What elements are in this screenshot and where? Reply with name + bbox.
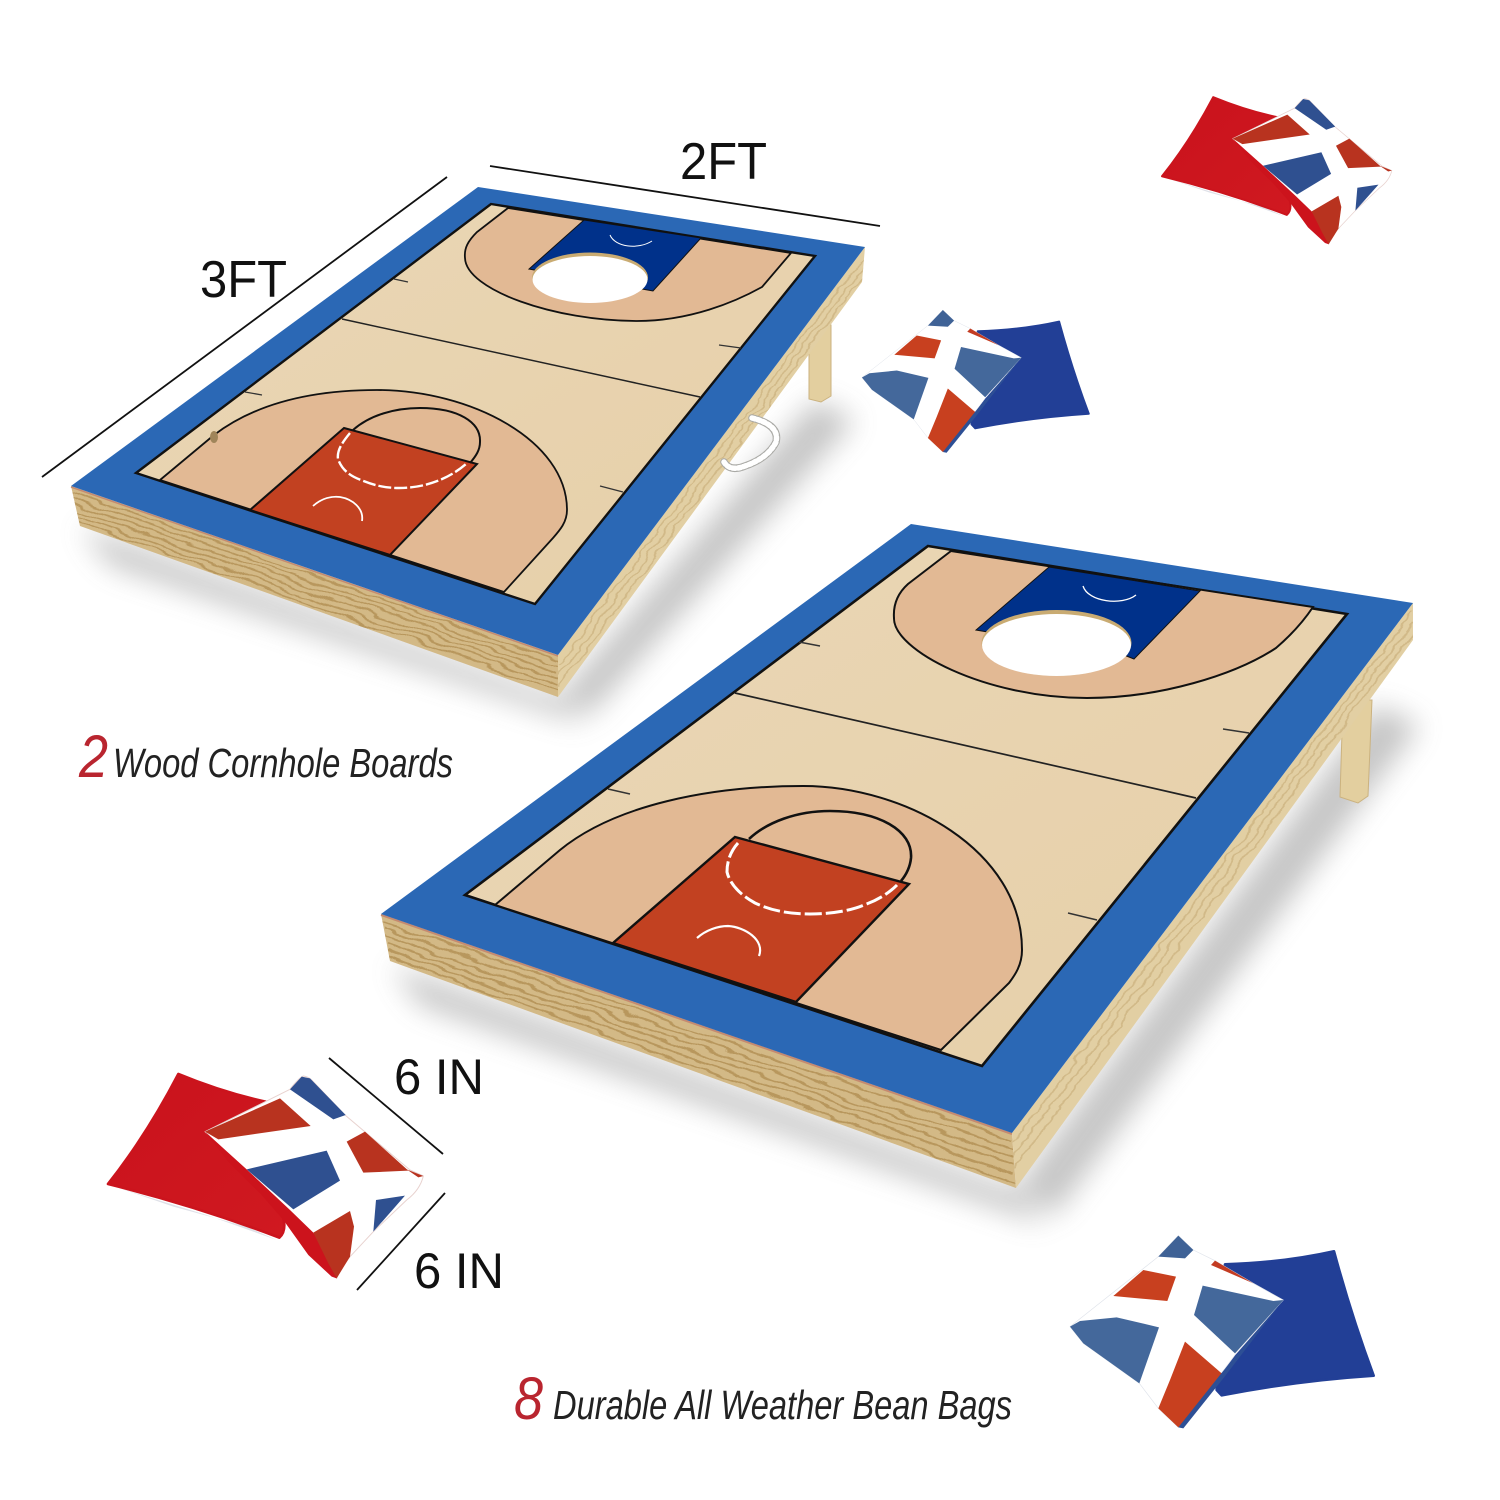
board 1 front wood side (71, 486, 558, 697)
caption text boards: Wood Cornhole Boards (113, 740, 453, 786)
label: 2FT: 2FT (680, 133, 767, 191)
board 1 shadow (80, 400, 855, 725)
board 1 dashed white arc (338, 433, 466, 488)
bean bag pair: red, lower left (108, 1074, 423, 1278)
caption text bags: Durable All Weather Bean Bags (553, 1382, 1012, 1428)
board 2 upper key arc (894, 551, 1313, 698)
dimension line: 2FT (490, 166, 880, 226)
board 2 midline (735, 693, 1196, 798)
label: 6 IN top: 6 IN (394, 1049, 484, 1105)
bean bag pair: blue, middle (862, 310, 1089, 453)
board 2 shadow (392, 705, 1420, 1225)
label: 6 IN bottom: 6 IN (414, 1243, 504, 1299)
icon: rope handle (724, 418, 776, 468)
board 2 front wood side (381, 914, 1016, 1188)
board 2 navy key (976, 567, 1200, 659)
board 2: large cornhole board (381, 524, 1420, 1225)
board 2 dashed white arc (727, 843, 897, 914)
board 1 tick marks (245, 279, 741, 492)
board 1 court knot mark (210, 431, 218, 443)
board 2 tick marks (608, 642, 1249, 920)
caption: 2 Wood Cornhole Boards (78, 723, 453, 790)
board 1 white small arc (313, 497, 362, 521)
dimension line: 6 IN top (329, 1058, 443, 1154)
board 1 court (136, 204, 815, 604)
bean bag pair: red, upper right (1162, 97, 1392, 244)
board 1 red key (250, 428, 477, 555)
label: 3FT: 3FT (200, 251, 287, 309)
board 2 leg (1340, 700, 1372, 803)
board 2 lower key arc (495, 786, 1022, 1050)
board 1 lower key arc (160, 390, 567, 592)
board 1 hole (532, 252, 648, 303)
board 2 white small arc (697, 926, 760, 956)
board 1 blue top frame (71, 187, 865, 655)
board 1: small cornhole board (71, 187, 865, 725)
board 1 navy small arc (610, 235, 652, 246)
board 1 free throw circle (353, 408, 480, 463)
board 2 red key (613, 837, 909, 1002)
board 2 court (465, 546, 1347, 1066)
board 2 hole (982, 610, 1132, 676)
board 1 right wood side (558, 247, 865, 697)
caption: 8 Durable All Weather Bean Bags (514, 1365, 1012, 1432)
board 1 navy key (529, 220, 701, 291)
board 2 right wood side (1012, 603, 1413, 1188)
board 1 leg (809, 325, 831, 402)
red numeral 8: 8 (514, 1365, 544, 1432)
board 1 midline (342, 319, 700, 397)
bean bag pair: blue, lower right (1070, 1236, 1374, 1428)
board 1 upper key arc (465, 208, 791, 321)
board 2 blue top frame (381, 524, 1413, 1133)
dimension line: 6 IN bottom (357, 1193, 445, 1290)
board 2 navy small arc (1083, 586, 1136, 601)
board 2 free throw circle (749, 811, 911, 881)
red numeral 2: 2 (78, 723, 108, 790)
dimension line: 3FT (42, 177, 447, 477)
